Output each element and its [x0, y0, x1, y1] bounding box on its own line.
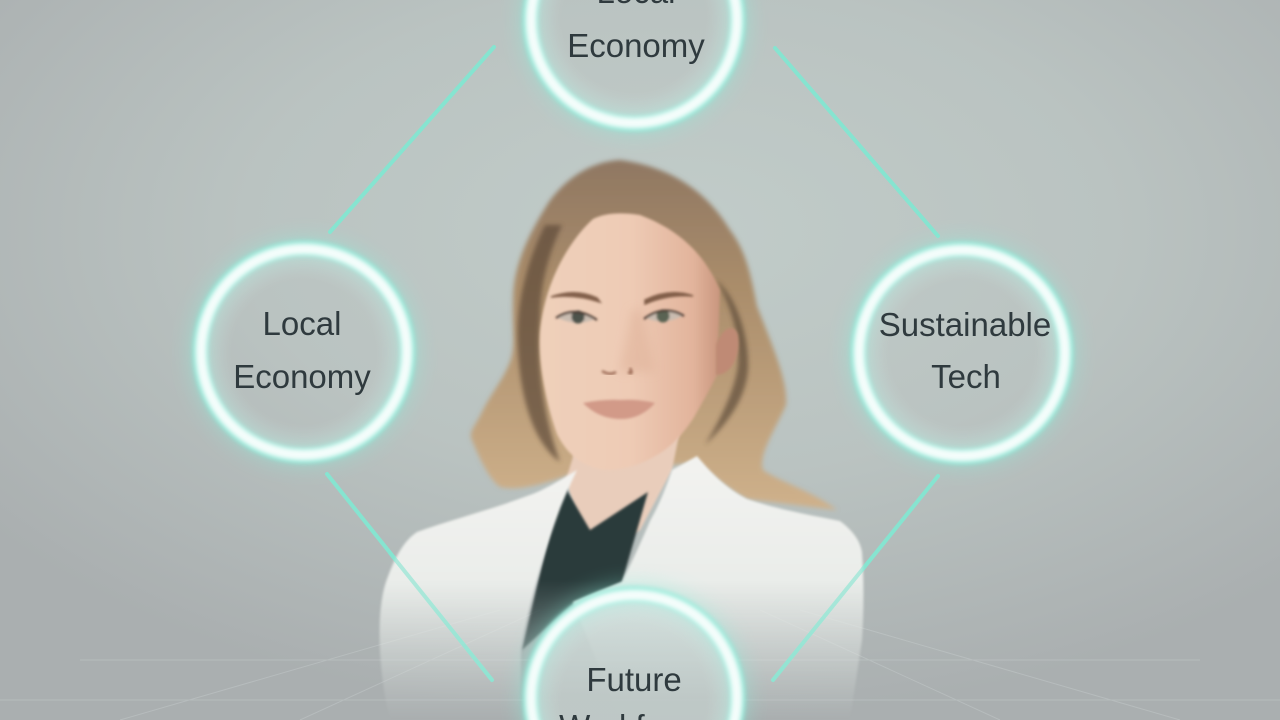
hair shadow left	[517, 225, 562, 462]
node: top Local Economy	[529, 0, 739, 125]
jacket right	[573, 456, 864, 720]
face	[540, 213, 720, 470]
node: left Local Economy: Economy	[233, 358, 371, 395]
hair back	[471, 160, 837, 510]
node: right Sustainable Tech: Tech	[931, 358, 1001, 395]
connector lines	[327, 47, 938, 680]
node: top Local Economy: Economy	[567, 27, 705, 64]
node: right Sustainable Tech: Sustainable	[879, 306, 1051, 343]
node: bottom Future Workforce	[529, 593, 739, 720]
node: right Sustainable Tech	[857, 248, 1067, 458]
nose shadow	[622, 314, 650, 371]
node: bottom Future Workforce: Future	[586, 661, 682, 698]
faint floor lines	[0, 610, 1280, 720]
node: left Local Economy	[199, 247, 409, 457]
brows	[551, 293, 693, 304]
jacket left	[380, 470, 577, 720]
hair shadow right	[705, 280, 748, 445]
neck	[566, 436, 680, 533]
portrait	[380, 160, 864, 720]
ear	[716, 328, 739, 375]
lips	[583, 400, 655, 419]
eyes	[556, 310, 684, 324]
node: left Local Economy: Local	[263, 305, 341, 342]
nostrils	[602, 368, 632, 374]
dark blouse	[522, 482, 648, 650]
lower connector overlay	[390, 553, 870, 680]
